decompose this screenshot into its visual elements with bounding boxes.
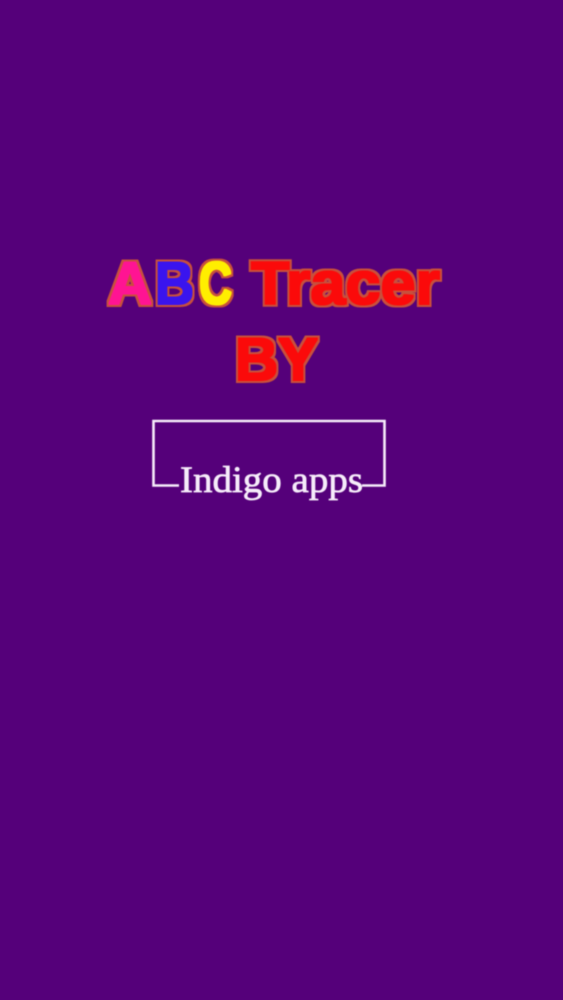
logo text: Indigo apps [180, 460, 363, 501]
logo: Indigo apps [154, 421, 384, 501]
heading: BY: BY [235, 326, 318, 393]
letter A: A [108, 250, 152, 317]
word Tracer: Tracer [251, 250, 440, 317]
logo frame [154, 421, 384, 486]
letter C: C [199, 250, 232, 317]
title: ABC Tracer [108, 250, 440, 317]
letter B: B [155, 250, 194, 317]
